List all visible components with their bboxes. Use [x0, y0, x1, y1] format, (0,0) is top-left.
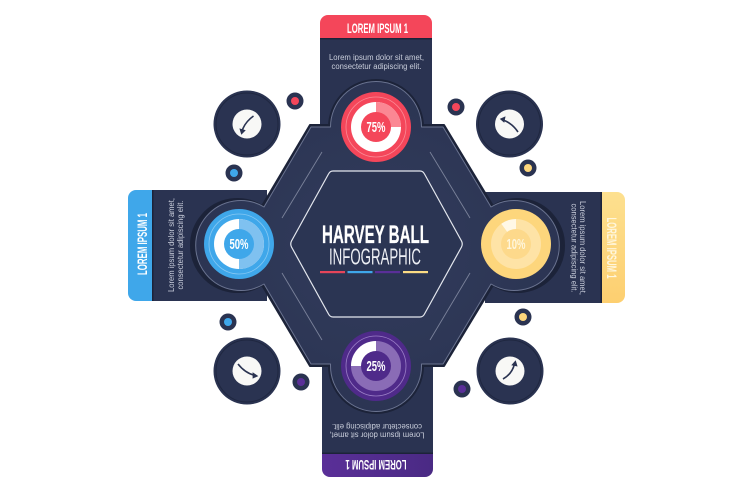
- inner hexagon: [291, 171, 462, 317]
- label 10%: 10%: [506, 237, 526, 253]
- left panel text: Lorem ipsum dolor sit amet,: [167, 198, 176, 292]
- panel: top: [320, 15, 432, 133]
- label 50%: 50%: [230, 237, 249, 253]
- right panel text: Lorem ipsum dolor sit amet,: [578, 201, 587, 295]
- icon: dial bottom left: [214, 338, 280, 404]
- panel: right: [485, 192, 625, 303]
- right panel text: consectetur adipiscing elit.: [570, 204, 578, 292]
- bottom panel text: Lorem ipsum dolor sit amet,: [330, 430, 424, 440]
- right panel text: [570, 201, 587, 295]
- top panel header: [320, 15, 432, 38]
- panel: bottom: [322, 360, 433, 477]
- bottom panel heading: LOREM IPSUM 1: [345, 457, 407, 472]
- title: [320, 221, 429, 273]
- icon: dial bottom right: [476, 338, 544, 404]
- right panel heading: LOREM IPSUM 1: [604, 217, 619, 279]
- right panel header: [602, 192, 625, 303]
- top panel text: Lorem ipsum dolor sit amet,: [329, 53, 424, 62]
- top panel heading: LOREM IPSUM 1: [347, 21, 408, 36]
- left panel heading: LOREM IPSUM 1: [135, 213, 150, 275]
- harvey ball: 75%: [341, 92, 411, 162]
- harvey ball: 25%: [341, 331, 411, 401]
- title line 1: HARVEY BALL: [322, 221, 429, 249]
- bottom panel text: [330, 422, 424, 440]
- harvey ball: 10%: [481, 209, 551, 279]
- label 25%: 25%: [366, 359, 386, 375]
- left panel header: [128, 190, 152, 301]
- small dots: [220, 92, 536, 398]
- panel: left: [128, 190, 267, 301]
- icon: dial top left: [214, 90, 280, 158]
- bottom panel header: [322, 454, 433, 477]
- colour key bars: [320, 271, 428, 273]
- bottom panel text: consectetur adipiscing elit.: [332, 422, 422, 431]
- title line 2: INFOGRAPHIC: [329, 244, 421, 270]
- harvey ball: 50%: [204, 209, 274, 279]
- left panel text: consectetur adipiscing elit.: [176, 200, 185, 290]
- icon: dial top right: [476, 90, 543, 158]
- label 75%: 75%: [366, 120, 386, 136]
- top panel text: [329, 53, 424, 71]
- decorative hexagon lines: [282, 152, 470, 340]
- top panel text: consectetur adipiscing elit.: [332, 62, 422, 71]
- central hexagon body: [191, 80, 564, 413]
- left panel text: [167, 198, 185, 292]
